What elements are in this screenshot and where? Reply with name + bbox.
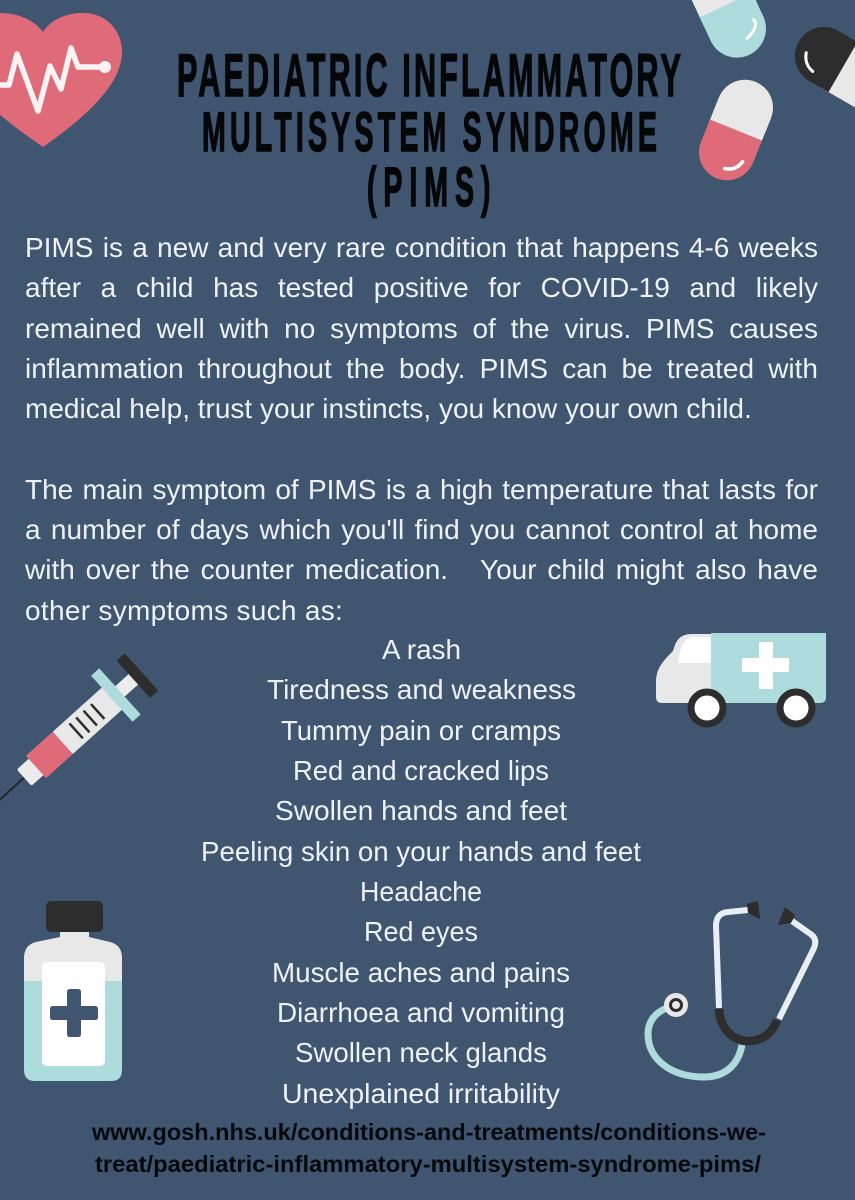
symptom list	[201, 634, 641, 1109]
symptom list: Unexplained irritability	[282, 1078, 560, 1109]
source link	[91, 1119, 766, 1177]
text block: main symptom: other symptoms such as:	[25, 595, 343, 626]
symptom list: Red eyes	[364, 916, 478, 947]
symptom list: Tummy pain or cramps	[281, 715, 561, 746]
symptom list: Tiredness and weakness	[267, 674, 576, 705]
text block: what PIMS is	[25, 232, 818, 424]
icon: syringe	[0, 649, 162, 825]
icon: black capsule	[784, 16, 855, 117]
text block: what PIMS is: inflammation throughout the body. PIMS can be treated with	[25, 353, 818, 384]
icon: medicine bottle	[24, 901, 122, 1081]
symptom list: Muscle aches and pains	[272, 957, 570, 988]
symptom list: Swollen hands and feet	[275, 795, 567, 826]
icon: teal capsule	[674, 0, 776, 67]
symptom list: Swollen neck glands	[295, 1037, 547, 1068]
symptom list: Diarrhoea and vomiting	[277, 997, 565, 1028]
text block: main symptom: The main symptom of PIMS is a high temperature that lasts for	[25, 474, 818, 505]
source link: www.gosh.nhs.uk/conditions-and-treatments/conditions-we-	[91, 1119, 766, 1145]
text block: what PIMS is: medical help, trust your instincts, you know your own child.	[25, 393, 752, 424]
symptom list: Peeling skin on your hands and feet	[201, 836, 641, 867]
text block: main symptom: a number of days which you'll find you cannot control at home	[25, 514, 818, 545]
source link: treat/paediatric-inflammatory-multisystem-syndrome-pims/	[95, 1151, 762, 1177]
icon: ambulance	[656, 633, 826, 724]
icon: stethoscope	[648, 901, 815, 1077]
title	[177, 43, 681, 219]
icon: red capsule	[691, 71, 781, 189]
text block: what PIMS is: PIMS is a new and very rare condition that happens 4-6 weeks	[25, 232, 818, 263]
symptom list: Red and cracked lips	[293, 755, 549, 786]
symptom list: Headache	[360, 876, 482, 907]
title: MULTISYSTEM SYNDROME	[202, 102, 657, 164]
text block: main symptom	[25, 474, 818, 626]
title: (PIMS)	[367, 157, 490, 219]
text block: what PIMS is: remained well with no symptoms of the virus. PIMS causes	[25, 313, 818, 344]
symptom list: A rash	[382, 634, 461, 665]
text block: what PIMS is: after a child has tested positive for COVID-19 and likely	[25, 272, 818, 303]
text block: main symptom: with over the counter medication. Your child might also have	[25, 554, 818, 585]
title: PAEDIATRIC INFLAMMATORY	[177, 43, 681, 110]
icon: heart with heartbeat line	[0, 13, 122, 147]
